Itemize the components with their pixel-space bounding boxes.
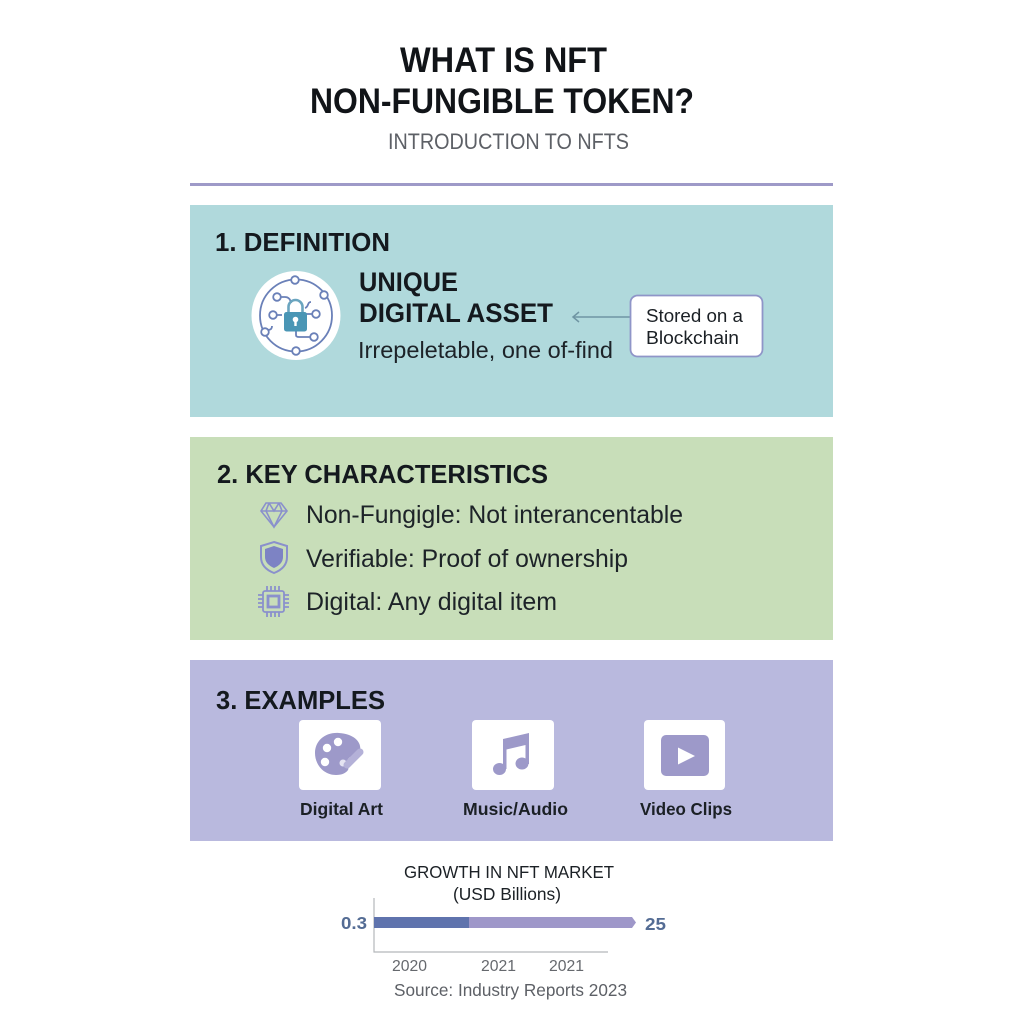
label: digital art: Digital Art <box>300 799 383 819</box>
callout: stored on a blockchain <box>630 296 762 356</box>
headline: unique digital asset <box>359 267 553 328</box>
text: verifiable: Verifiable: Proof of ownership <box>306 545 628 573</box>
value: start: 0.3 <box>341 913 367 933</box>
icon: digital lock <box>252 271 340 360</box>
chart title <box>404 862 614 904</box>
title: NON-FUNGIBLE TOKEN? <box>310 82 694 121</box>
panel: examples <box>190 660 833 841</box>
chart: growth in NFT market <box>341 862 666 1000</box>
x axis labels: 2021 <box>481 958 516 975</box>
x axis labels: 2021 <box>549 958 584 975</box>
value: end: 25 <box>645 914 666 934</box>
callout: stored on a blockchain: Blockchain <box>646 328 739 348</box>
icon: palette <box>315 733 360 775</box>
example: digital art <box>299 720 383 819</box>
label: video clips: Video Clips <box>640 799 732 819</box>
heading: definition: 1. DEFINITION <box>215 227 390 257</box>
description: Irrepeletable, one of-find <box>358 337 613 363</box>
icon: chip <box>258 586 289 617</box>
heading: examples: 3. EXAMPLES <box>216 685 385 715</box>
label: music/audio: Music/Audio <box>463 799 568 819</box>
example: music/audio <box>463 720 568 819</box>
chart title: GROWTH IN NFT MARKET <box>404 862 614 882</box>
bar <box>374 917 636 928</box>
text: digital: Digital: Any digital item <box>306 588 557 616</box>
icon: music note <box>493 733 529 775</box>
headline: unique digital asset: UNIQUE <box>359 267 458 297</box>
chart title: (USD Billions) <box>453 884 561 904</box>
subtitle: INTRODUCTION TO NFTS <box>388 129 629 154</box>
icon: shield <box>261 542 287 573</box>
text: non-fungible: Non-Fungigle: Not interancentable <box>306 501 683 529</box>
icon: play button <box>661 735 709 776</box>
headline: unique digital asset: DIGITAL ASSET <box>359 298 553 328</box>
example: video clips <box>640 720 732 819</box>
title: WHAT IS NFT <box>400 41 607 80</box>
callout: stored on a blockchain: Stored on a <box>646 306 744 326</box>
arrow <box>573 312 630 322</box>
panel: key characteristics <box>190 437 833 640</box>
x axis labels <box>392 958 584 975</box>
heading: key characteristics: 2. KEY CHARACTERISTICS <box>217 459 548 489</box>
panel: definition <box>190 205 833 417</box>
title <box>310 41 694 121</box>
icon: diamond <box>261 503 287 527</box>
x axis labels: 2020 <box>392 958 427 975</box>
source note: Source: Industry Reports 2023 <box>394 980 627 1000</box>
axes <box>374 898 608 952</box>
